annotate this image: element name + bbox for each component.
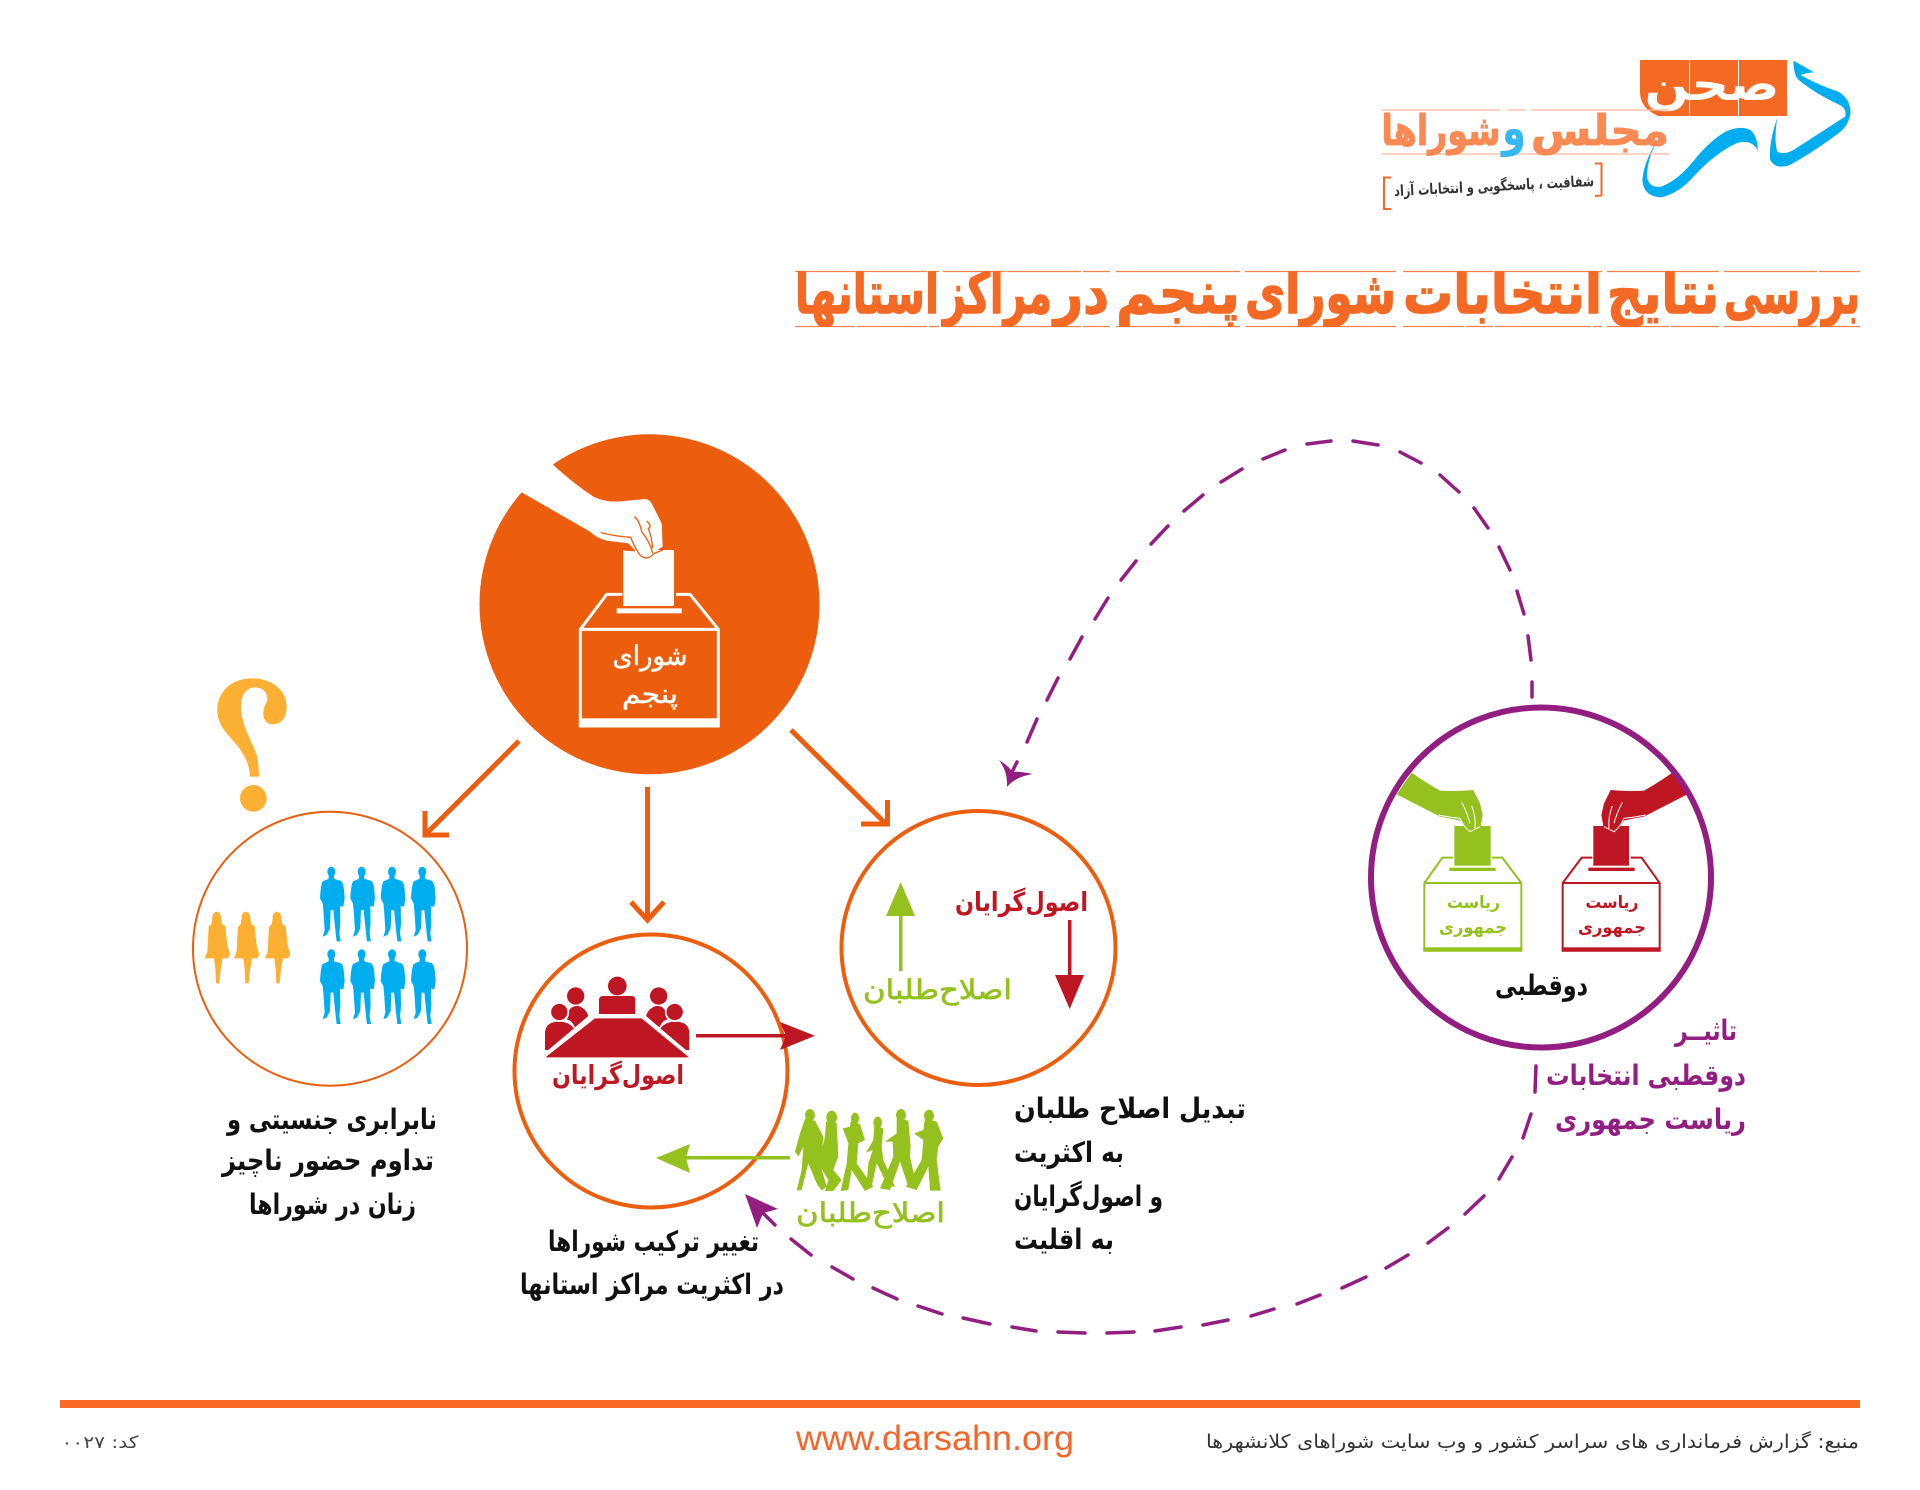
arrow: dashed curve to right circle: [999, 441, 1532, 787]
green box label: جمهوری: [1439, 918, 1507, 938]
green box label: [1439, 893, 1507, 938]
footer bar: [60, 1400, 1860, 1408]
icon: green ballot box and hand: [1397, 773, 1522, 952]
panel: polarisation circle: [1371, 708, 1711, 1048]
title: [795, 270, 1860, 328]
text: swap of majority: [1014, 1092, 1246, 1256]
label: principlists: اصول‌گرایان: [955, 887, 1088, 918]
text: effect of presidential polarisation: [1546, 1014, 1746, 1136]
circle outline: [193, 812, 467, 1086]
text: swap of majority: به اقلیت: [1014, 1223, 1114, 1256]
text: council composition change: در اکثریت مراکز استانها: [520, 1268, 784, 1301]
text: swap of majority: به اکثریت: [1014, 1136, 1124, 1169]
text: gender inequality: [220, 1103, 437, 1221]
arrow: green to left: [656, 1144, 790, 1173]
arrow: to right circle: [791, 730, 888, 824]
logo: [1382, 57, 1851, 209]
arrow: to centre circle: [631, 787, 664, 920]
arrow: red to right: [696, 1022, 815, 1050]
footer website: www.darsahn.org: [795, 1419, 1074, 1458]
footer code: کد: ۰۰۲۷: [62, 1433, 140, 1453]
text: effect of presidential polarisation: دوقطبی انتخابات: [1546, 1059, 1746, 1092]
icon: hand with ballot box: [513, 457, 719, 727]
icon: red ballot box and hand: [1562, 773, 1687, 952]
logo brackets: [1384, 164, 1602, 209]
logo mark: blue calligraphy: [1642, 61, 1851, 197]
text: gender inequality: نابرابری جنسیتی و: [225, 1103, 437, 1136]
arrow: dashed curve to centre circle: [745, 1066, 1536, 1333]
logo slogan: شفافیت ، پاسخگویی و انتخابات آزاد: [1394, 172, 1594, 201]
title: انتخابات: [1403, 259, 1602, 327]
logo orange block: صحن: [1644, 57, 1780, 111]
footer source: منبع: گزارش فرمانداری های سراسر کشور و وب سایت شوراهای کلانشهرها: [1206, 1430, 1859, 1453]
text: effect of presidential polarisation: تاثیــر: [1673, 1014, 1737, 1047]
main orange circle: [480, 434, 820, 774]
text: effect of presidential polarisation: ریاست جمهوری: [1555, 1103, 1746, 1136]
text: gender inequality: تداوم حضور ناچیز: [220, 1144, 434, 1177]
title: استانها: [795, 259, 939, 328]
panel: gender inequality circle: [193, 812, 467, 1086]
panel: centre circle: [514, 934, 815, 1208]
arrow: green up: [886, 882, 915, 971]
text: swap of majority: و اصول‌گرایان: [1014, 1180, 1163, 1213]
text: swap of majority: تبدیل اصلاح طلبان: [1014, 1092, 1246, 1125]
logo text: majlis: مجلس: [1531, 106, 1669, 155]
logo subtitle lines: [1382, 110, 1669, 154]
label: reformists: اصلاح‌طلبان: [863, 975, 1012, 1006]
title: نتایج: [1607, 259, 1719, 328]
title: شورای: [1245, 259, 1396, 328]
ring: [1371, 708, 1711, 1048]
label: principlists: اصول‌گرایان: [552, 1060, 684, 1091]
arrow: to left circle: [425, 741, 519, 835]
red box label: جمهوری: [1578, 918, 1646, 938]
logo text: shoraha: شوراها: [1382, 106, 1500, 156]
red box label: ریاست: [1586, 893, 1638, 913]
circle outline: [514, 934, 788, 1208]
ballot box label: شورای: [612, 641, 688, 672]
ballot box label line 2: پنجم: [622, 679, 678, 710]
text: council composition change: تغییر ترکیب شوراها: [548, 1225, 759, 1258]
icon: walking reformists: [795, 1109, 943, 1191]
title: در: [1051, 259, 1109, 327]
logo text: va: و: [1500, 99, 1526, 158]
arrow: red down: [1055, 920, 1084, 1009]
label: bipolar: دوقطبی: [1495, 969, 1588, 1002]
text: gender inequality: زنان در شوراها: [249, 1188, 416, 1221]
green box label: ریاست: [1447, 893, 1500, 913]
title: پنجم: [1116, 259, 1240, 328]
red box label: [1578, 893, 1646, 938]
panel: right circle: [842, 811, 1116, 1085]
label: reformists: اصلاح‌طلبان: [796, 1198, 945, 1229]
title: مراکز: [941, 259, 1052, 328]
panel: main ballot circle: [480, 434, 820, 774]
icon: women: [205, 912, 290, 983]
circle outline: [842, 811, 1116, 1085]
text: council composition change: [520, 1225, 784, 1301]
icon: men: [320, 867, 436, 1024]
icon: question mark: [217, 678, 287, 812]
icon: meeting table: [545, 977, 689, 1057]
